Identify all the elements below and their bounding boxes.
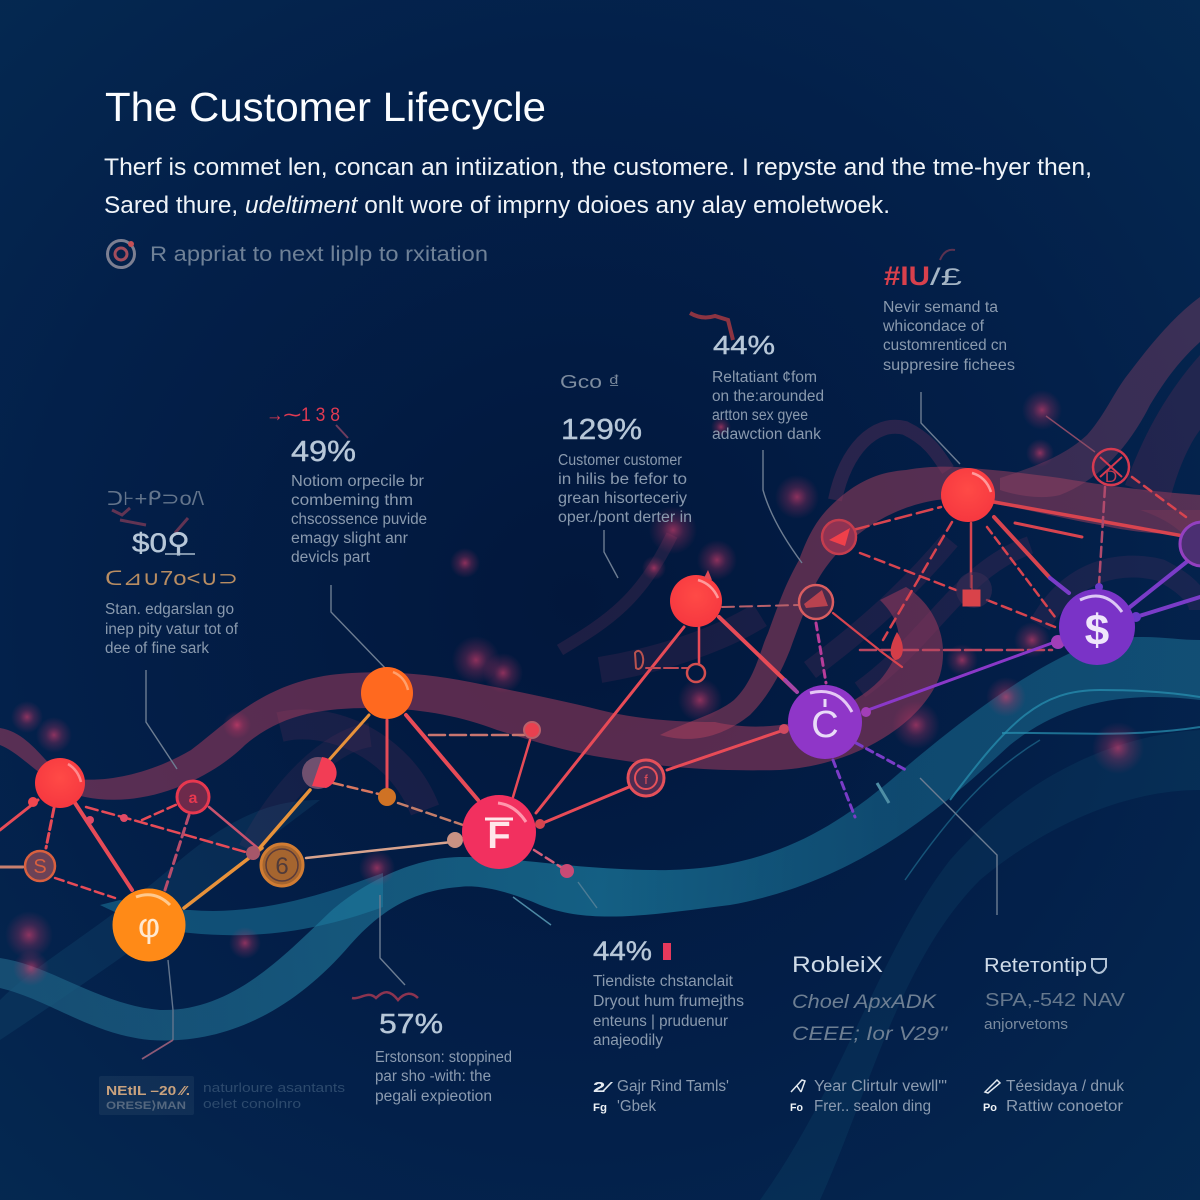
footer: item 2: Fo [790,1102,803,1114]
callout: 5: suppresire fichees [883,357,1015,374]
node: orange phi [112,888,186,962]
ring: orange coin [261,844,303,886]
panel: Retentontip: anjorvetoms [984,1016,1068,1033]
node: orange top [361,667,413,719]
red ribbons [0,297,1200,850]
callout: 7: enteuns | pruduenur [593,1013,728,1030]
half node [302,757,337,789]
edges: left cluster [0,800,260,898]
label box [99,1076,346,1115]
callout: 5: customrenticed cn [883,337,1007,354]
callout: 3: oper./pont derter in [558,509,692,526]
callout: 3: in hilis be fefor to [558,471,687,488]
edges: purple links [785,560,1200,817]
panel: RobleiX: Choel ApxADK [792,992,938,1013]
ring: red glow [822,520,856,554]
callout: 4: artton sex gyee [712,407,808,424]
node: red peak [670,570,722,627]
footer: item 2 [790,1078,947,1115]
callout: 1: ᑐ⊦+ᑭ⊃o/\ [107,489,205,510]
note with icon [108,240,488,268]
footer: item 3: Rattiw conoetor [1006,1098,1123,1115]
connector lines to callouts [142,392,1095,1059]
ring: orange coin: 6 [275,853,289,880]
callout: 7: Tiendiste chstanclait [593,973,734,990]
callout: 7: 44% [593,936,652,966]
node: purple C [788,685,862,759]
edges: right cluster [816,477,1189,683]
callout: 3: grean hisorteceriy [558,490,687,507]
callout: 4: adawction dank [712,426,821,443]
callout: 1: ᑕ⊿∪7o<∪⊃ [105,568,238,590]
footer: item 1: 2⁄ [593,1079,614,1096]
callout: 7: Dryout hum frumejths [593,993,744,1010]
callout: 2: devicls part [291,549,371,566]
callout: 5: #IU [884,261,930,291]
callout: 1: dee of fine sark [105,640,209,657]
footer: item 1: Gajr Rind Tamls' [617,1078,729,1095]
callout: 2: chscossence puvide [291,511,427,528]
panel: RobleiX [792,952,948,1045]
callout: 6: pegali expieotion [375,1088,492,1105]
ring: mid: f [644,772,648,787]
callout: 3: 129% [561,414,642,446]
callout: 7 [593,936,744,1049]
callout: 2: combeming thm [291,492,413,509]
callout: 5: /£ [930,264,962,291]
callout: 4: Reltatiant ¢fom [712,369,817,386]
node: red left [35,758,85,808]
footer: item 3: Po [983,1102,997,1114]
node: purple C: C [811,704,839,746]
teal ribbons [0,637,1200,1200]
edges: middle cluster [306,605,799,871]
callout: 3: Customer customer [558,452,682,469]
callout: 2 [266,405,427,566]
footer: item 1: 'Gbek [617,1098,656,1115]
node: purple dollar [1059,589,1135,665]
callout: 3 [558,372,692,526]
footer: item 2: Frer.. sealon ding [814,1098,931,1115]
label box: NEtIL –20 ⁄⁄. [106,1083,190,1098]
callout: 4: on the:arounded [712,388,824,405]
node: orange phi: φ [138,907,160,945]
label box: oelet conolnro [203,1096,301,1111]
small icon: box [956,572,992,608]
panel: Retentontip [984,954,1125,1033]
node: pink T [462,795,536,869]
ring: top left: a [189,790,198,807]
panel: RobleiX: RobleiX [792,952,883,977]
small ring nodes [25,449,1200,886]
callout: 1: $0⚲ [132,528,190,558]
callout: 2: 49% [291,436,356,468]
ring: top left [177,781,209,813]
orange dot [378,788,396,806]
footer: item 3: Téesidaya / dnuk [1006,1078,1124,1095]
footer: item 2: Year Clirtulr vewll'" [814,1078,947,1095]
callout: 5: whicondace of [882,318,985,335]
label box: ORESE⟩MAN [106,1100,186,1112]
footer: item 1: Fg [593,1102,607,1114]
callout: 7: anajeodily [593,1032,663,1049]
ring: edge purple [1180,522,1200,566]
callout: 1: Stan. edgarslan go [105,601,234,618]
label box: naturloure asantants [203,1080,346,1095]
callout: 6: par sho -with: the [375,1068,491,1085]
subtitle: Therf is commet len, concan an intiization, the customere. I repyste and the tme-hyer then, [104,154,1092,181]
ring: S: S [33,856,47,878]
node: pink T: F [487,815,511,857]
small icon: c-dot [635,651,705,682]
ring: far right: D [1105,467,1117,486]
panel: RobleiX: CEEE; Ior V29" [792,1024,948,1045]
small connector dots [28,583,1141,878]
footer: item 1 [593,1078,729,1115]
red ring dot [524,722,540,738]
note with icon: R appriat to next liplp to rxitation [150,243,488,266]
panel: Retentontip: Reteтontip [984,954,1087,977]
glow dots [5,390,1144,986]
callout: 6: 57% [379,1008,443,1039]
callout: 6 [352,992,512,1105]
ring: upper right mid [799,585,833,619]
edges: orange links [184,715,369,908]
callout: 4: 44% [713,330,775,360]
ring: S [25,851,55,881]
callout: 4 [690,313,824,443]
callout: 3: Gco ₫ [560,372,620,392]
main nodes [35,468,1135,962]
callout: 2: Notiom orpecile br [291,473,424,490]
callout: 5 [882,250,1015,374]
callout: 5: Nevir semand ta [883,299,998,316]
callout: 6: Erstonson: stoppined [375,1049,512,1066]
ring: far right [1093,449,1129,486]
title: The Customer Lifecycle [105,84,546,130]
panel: Retentontip: SPA,-542 NAV [985,990,1125,1010]
subtitle: Sared thure, udeltiment onlt wore of imprny doioes any alay emoletwoek. [104,192,890,219]
node: purple dollar: $ [1085,606,1109,655]
ring: mid [628,760,664,796]
subtitle [104,154,1092,219]
network edges [0,477,1200,908]
callout: 1 [105,489,239,657]
footer: item 3 [983,1078,1124,1115]
node: red right [941,468,995,522]
callout: 2: emagy slight anr [291,530,408,547]
small icon: flame [891,632,903,660]
callout: 2: →⁓1 3 8 [266,405,340,426]
callout: 1: inep pity vatur tot of [105,621,239,638]
